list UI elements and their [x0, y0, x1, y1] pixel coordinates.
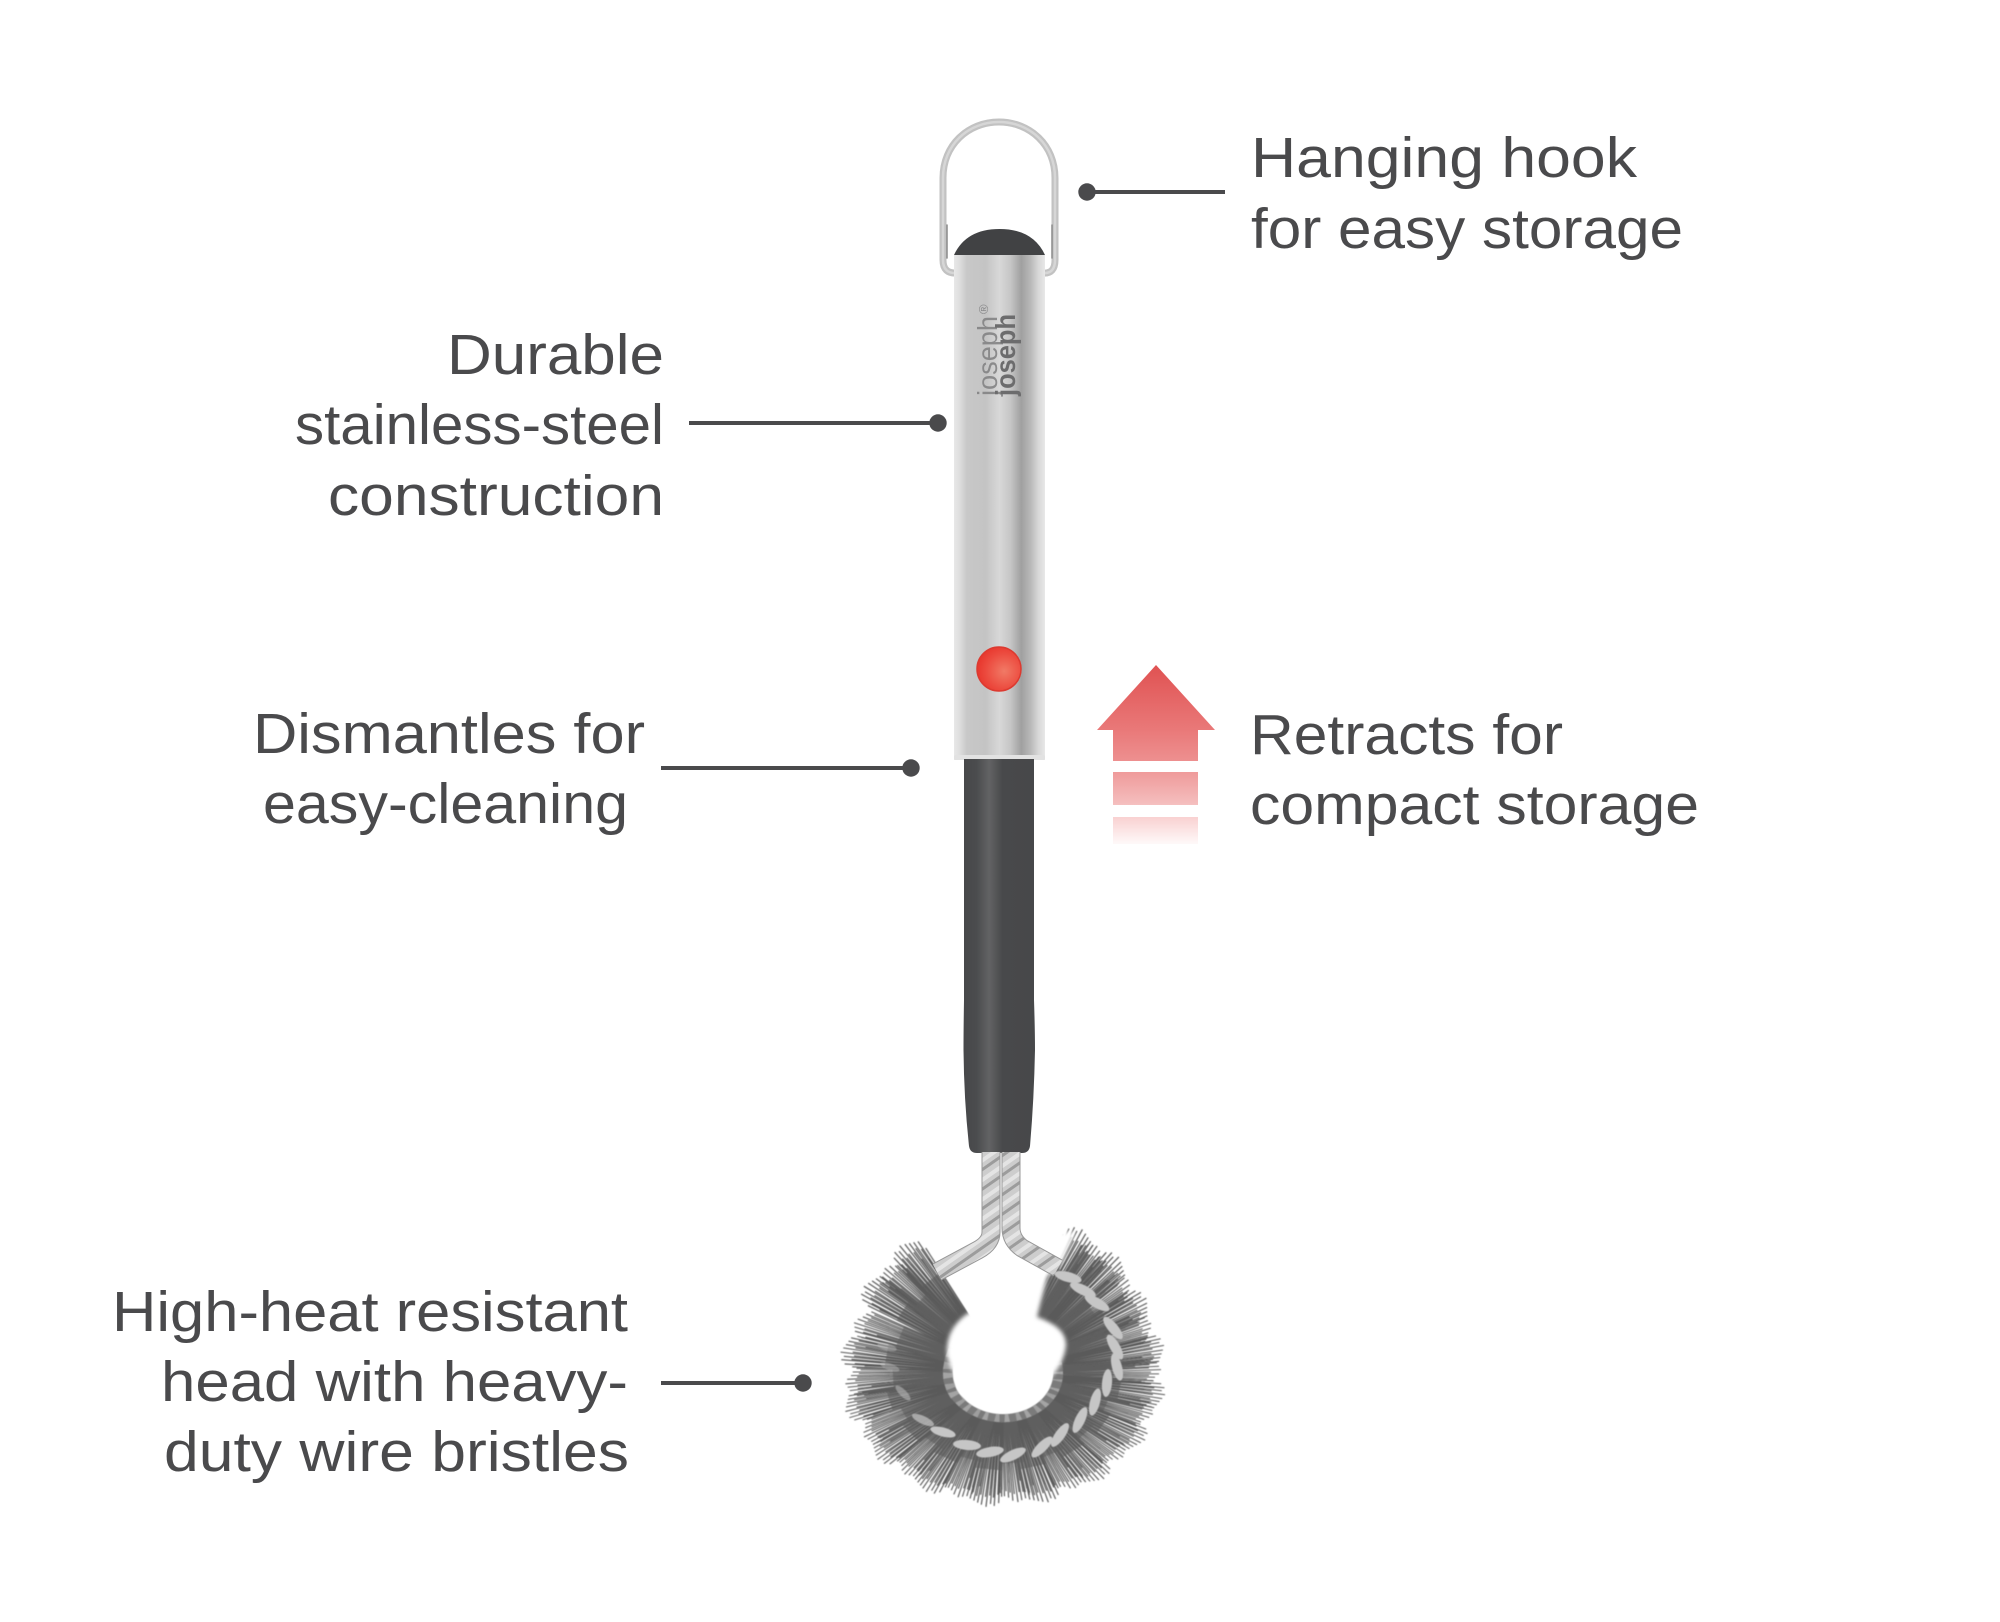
text: dismantles for easy-cleaning: [253, 702, 645, 836]
leader line: head: [661, 1374, 812, 1392]
twisted wire core: [876, 1269, 1126, 1465]
callout: retracts: [1097, 665, 1699, 844]
text: retracts for compact storage: [1250, 703, 1699, 837]
callout: dismantles: [253, 702, 920, 836]
icon: retract arrow: [1097, 665, 1215, 844]
leader line: stainless steel: [689, 414, 947, 432]
text: high-heat resistant head: High-heat resistant: [112, 1280, 628, 1344]
end cap dome: [954, 229, 1045, 255]
twisted wire stem: [937, 1152, 1058, 1272]
product: grill brush: [838, 122, 1167, 1508]
text: durable stainless-steel construction: [295, 323, 664, 528]
centre hole: [930, 1232, 1075, 1397]
logo: joseph joseph: joseph: [972, 316, 1003, 397]
text: durable stainless-steel construction: Durable: [447, 323, 664, 387]
callout: hanging hook: [1078, 126, 1683, 261]
bristle tufts: [838, 1222, 1167, 1508]
text: hanging hook: for easy storage: [1251, 197, 1683, 261]
stainless steel tube: [954, 255, 1045, 760]
callout: high-heat head: [112, 1280, 812, 1484]
text: high-heat resistant head: head with heavy-: [161, 1350, 628, 1414]
text: dismantles for easy-cleaning: easy-cleaning: [263, 772, 628, 836]
text: high-heat resistant head: [112, 1280, 629, 1484]
logo: joseph joseph: ®: [976, 304, 991, 314]
logo: joseph joseph: [972, 304, 1021, 397]
leader line: dismantles: [661, 759, 920, 777]
callout: durable stainless-steel: [295, 323, 947, 528]
text: durable stainless-steel construction: stainless-steel: [295, 393, 664, 457]
text: durable stainless-steel construction: construction: [328, 464, 664, 528]
text: hanging hook: [1251, 126, 1683, 261]
text: hanging hook: Hanging hook: [1251, 126, 1638, 190]
text: high-heat resistant head: duty wire bristles: [164, 1420, 629, 1484]
red release button: [977, 647, 1021, 691]
hanging hook wire: [943, 122, 1055, 273]
rubber handle: [964, 759, 1035, 1153]
leader line: hanging hook: [1078, 183, 1225, 201]
text: dismantles for easy-cleaning: Dismantles for: [253, 702, 645, 766]
logo: joseph joseph: joseph: [990, 314, 1021, 397]
text: retracts for compact storage: compact storage: [1250, 773, 1699, 837]
wire bristle head: [838, 1152, 1167, 1508]
text: retracts for compact storage: Retracts for: [1250, 703, 1563, 767]
